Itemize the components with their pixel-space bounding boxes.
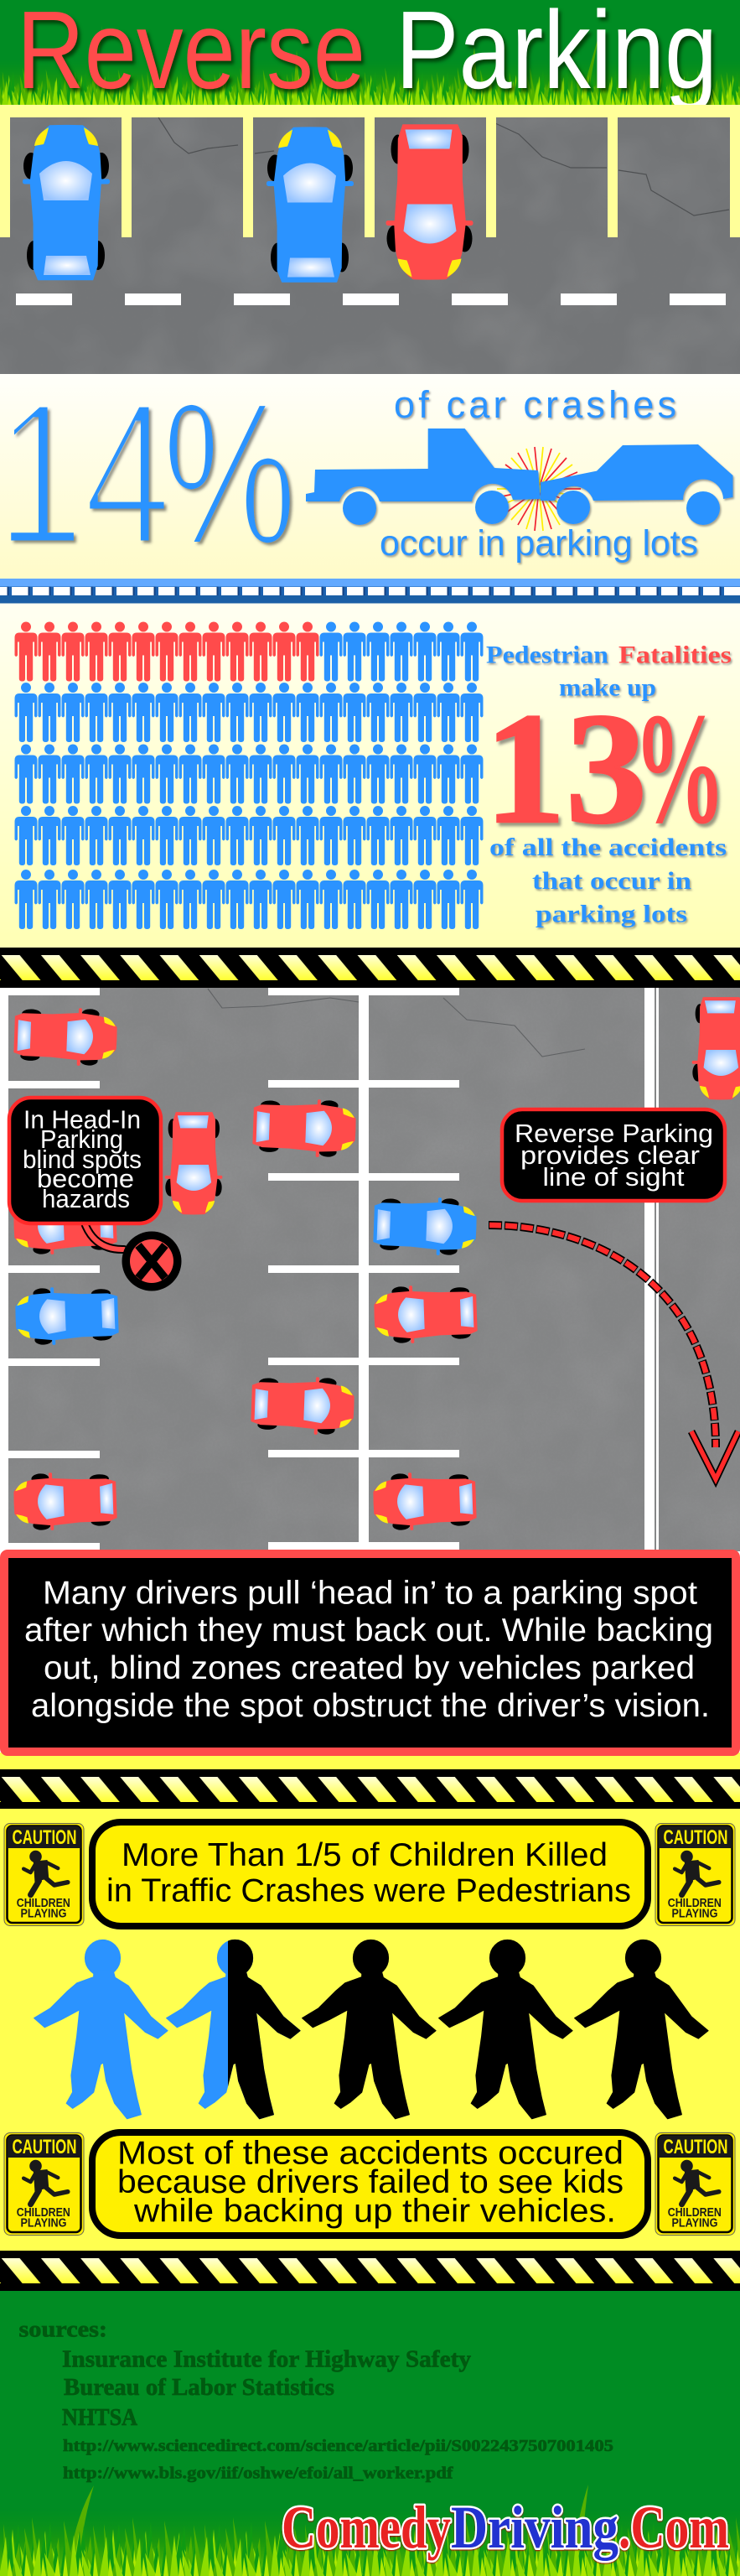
text box: most accidents (92, 2132, 648, 2236)
connector to hazard mark (84, 1221, 124, 1249)
hazard stripe band 2 (0, 1769, 740, 1809)
car: red pulling out (165, 1112, 222, 1214)
panel: footer (0, 2291, 740, 2576)
text: of all the accidents: that occur in (532, 867, 691, 895)
blue divider band (0, 579, 740, 604)
sources list: http://www.bls.gov/iif/oshwe/efoi/all_worker.pdf (63, 2464, 453, 2482)
callout: head-in parking: Parking (40, 1124, 123, 1154)
panel: parking lot diagram (0, 988, 740, 1551)
panel: yellow section background (0, 1753, 740, 2252)
icon: caution sign top left (4, 1823, 84, 1925)
hazard stripe band 1 (0, 948, 740, 988)
callout: reverse parking: provides clear (520, 1140, 700, 1170)
callout: head-in parking (9, 1098, 161, 1223)
sources list: Bureau of Labor Statistics (64, 2374, 334, 2401)
icon: caution sign bottom right (655, 2133, 735, 2236)
icon: crashing truck (306, 428, 541, 525)
icon: caution sign top left: CHILDREN (17, 1897, 70, 1910)
pictogram: 100 people, 13 red (15, 622, 483, 929)
sources list: NHTSA (62, 2404, 137, 2431)
text: occur in parking lots: occur in parking lots (380, 523, 698, 564)
car: red far right (692, 997, 740, 1099)
text box: head in explanation: alongside the spot obstruct the driver’s vision. (31, 1688, 710, 1724)
icon: caution sign bottom right: CHILDREN (668, 2206, 722, 2220)
text box: head in explanation: Many drivers pull ‘head in’ to a parking spot (43, 1575, 697, 1612)
white lane dashes (16, 293, 726, 305)
panel: header (0, 0, 740, 112)
icon: caution sign top right: PLAYING (672, 1907, 717, 1920)
text box: most accidents: Most of these accidents occured (117, 2135, 624, 2172)
white bay lines (0, 988, 659, 1551)
hazard stripe band 3 (0, 2251, 740, 2291)
child 2 split (167, 1940, 300, 2119)
icon: caution sign top left: PLAYING (20, 1907, 67, 1920)
crash sparks (497, 447, 581, 531)
panel: asphalt parking row (0, 105, 740, 374)
panel: pedestrian fatalities (0, 604, 740, 948)
child 4 black (439, 1940, 572, 2119)
icon: crashing car (541, 444, 732, 525)
child 3 black (303, 1940, 436, 2119)
callout: reverse parking: Reverse Parking (515, 1119, 713, 1148)
panel: 14% statistic (0, 359, 740, 588)
callout: reverse parking (502, 1109, 725, 1201)
icon: caution sign bottom left: CAUTION (12, 2136, 77, 2158)
car: blue 2 (267, 127, 354, 283)
icon: caution sign bottom left: PLAYING (20, 2216, 67, 2230)
callout: head-in parking: blind spots (23, 1145, 142, 1174)
car: red right bottom (372, 1471, 477, 1531)
icon: caution sign bottom left (4, 2133, 84, 2236)
sources list: Insurance Institute for Highway Safety (62, 2346, 471, 2373)
pictogram: five children, one fifth blue (34, 1940, 708, 2119)
grass: footer (0, 2485, 740, 2576)
car: blue left (14, 1285, 119, 1346)
text: of all the accidents (489, 834, 727, 927)
sources heading: sources: (18, 2316, 107, 2341)
text: of car crashes: of car crashes (394, 383, 676, 426)
big number 14%: % (163, 359, 297, 588)
text box: head in explanation (0, 1550, 740, 1756)
car: red centre upper (252, 1098, 357, 1158)
sources list (62, 2346, 613, 2482)
car: blue 1 (23, 125, 110, 280)
text box: head in explanation: after which they must back out. While backing (24, 1613, 713, 1649)
car: red hidden behind callout (13, 1195, 117, 1255)
big number 13% (484, 681, 726, 857)
icon: caution sign top right (655, 1823, 735, 1925)
child 5 black (575, 1940, 708, 2119)
icon: caution sign top left: CAUTION (12, 1826, 77, 1849)
big number 13%: 13 (484, 681, 647, 857)
text: pedestrian fatalities: Pedestrian (486, 641, 608, 669)
grass: header (0, 25, 740, 106)
car: red centre lower (251, 1375, 355, 1436)
logo: ComedyDriving.Com: Comedy (282, 2494, 451, 2561)
car: blue reverse parked (373, 1196, 478, 1256)
text: pedestrian fatalities: Fatalities (618, 641, 732, 669)
text: of all the accidents: parking lots (536, 901, 687, 927)
car: red right middle (373, 1284, 478, 1344)
title (17, 0, 717, 112)
callout: reverse parking: line of sight (543, 1162, 685, 1192)
callout: head-in parking: In Head-In (23, 1105, 141, 1134)
icon: caution sign bottom left: CHILDREN (17, 2206, 70, 2220)
text box: most accidents: because drivers failed to see kids (117, 2164, 624, 2200)
text box: children killed: More Than 1/5 of Children Killed (122, 1837, 608, 1873)
sources list: http://www.sciencedirect.com/science/article/pii/S0022437507001405 (63, 2437, 613, 2455)
text box: head in explanation: out, blind zones created by vehicles parked (44, 1650, 695, 1686)
child 1 blue (34, 1940, 168, 2119)
car: red bottom left (13, 1471, 117, 1531)
icon: caution sign top right: CHILDREN (668, 1897, 722, 1910)
icon: caution sign bottom right: PLAYING (672, 2216, 717, 2230)
callout: head-in parking: become (37, 1164, 134, 1193)
big number 14%: 14 (0, 359, 171, 588)
text: pedestrian fatalities (486, 641, 732, 669)
text box: children killed: in Traffic Crashes were Pedestrians (106, 1873, 631, 1909)
car: red top left (13, 1006, 118, 1067)
text box: most accidents: while backing up their vehicles. (133, 2194, 616, 2229)
text: of all the accidents: of all the accidents (489, 834, 727, 861)
text box: children killed (92, 1822, 648, 1926)
arrow: line of sight (489, 1225, 738, 1479)
logo: ComedyDriving.Com: Driving (451, 2494, 618, 2561)
car: red reversed (386, 124, 473, 280)
icon: hazard X (122, 1231, 181, 1291)
yellow kerb and bay lines (0, 105, 740, 237)
text: make up: make up (559, 674, 656, 701)
logo: ComedyDriving.Com (282, 2494, 729, 2561)
callout: head-in parking: hazards (42, 1184, 130, 1213)
